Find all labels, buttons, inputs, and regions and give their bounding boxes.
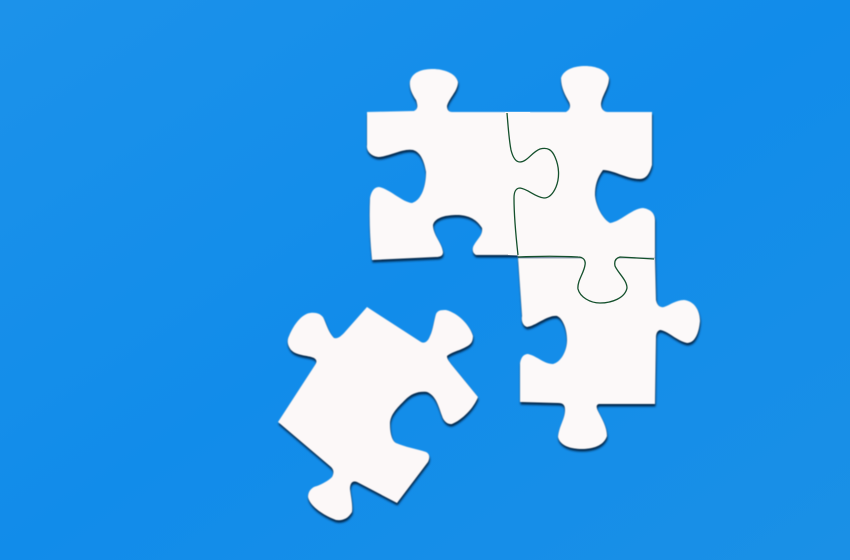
- piece: loose tilted: [278, 307, 478, 520]
- seam line: lower knob: [518, 256, 654, 303]
- piece: top right: [507, 66, 655, 258]
- piece shadows: [278, 68, 700, 523]
- piece: top left: [367, 69, 518, 260]
- seam filler: joins between pieces: [505, 112, 618, 266]
- seam line: vertical knob: [507, 113, 559, 255]
- piece: lower right: [518, 258, 700, 449]
